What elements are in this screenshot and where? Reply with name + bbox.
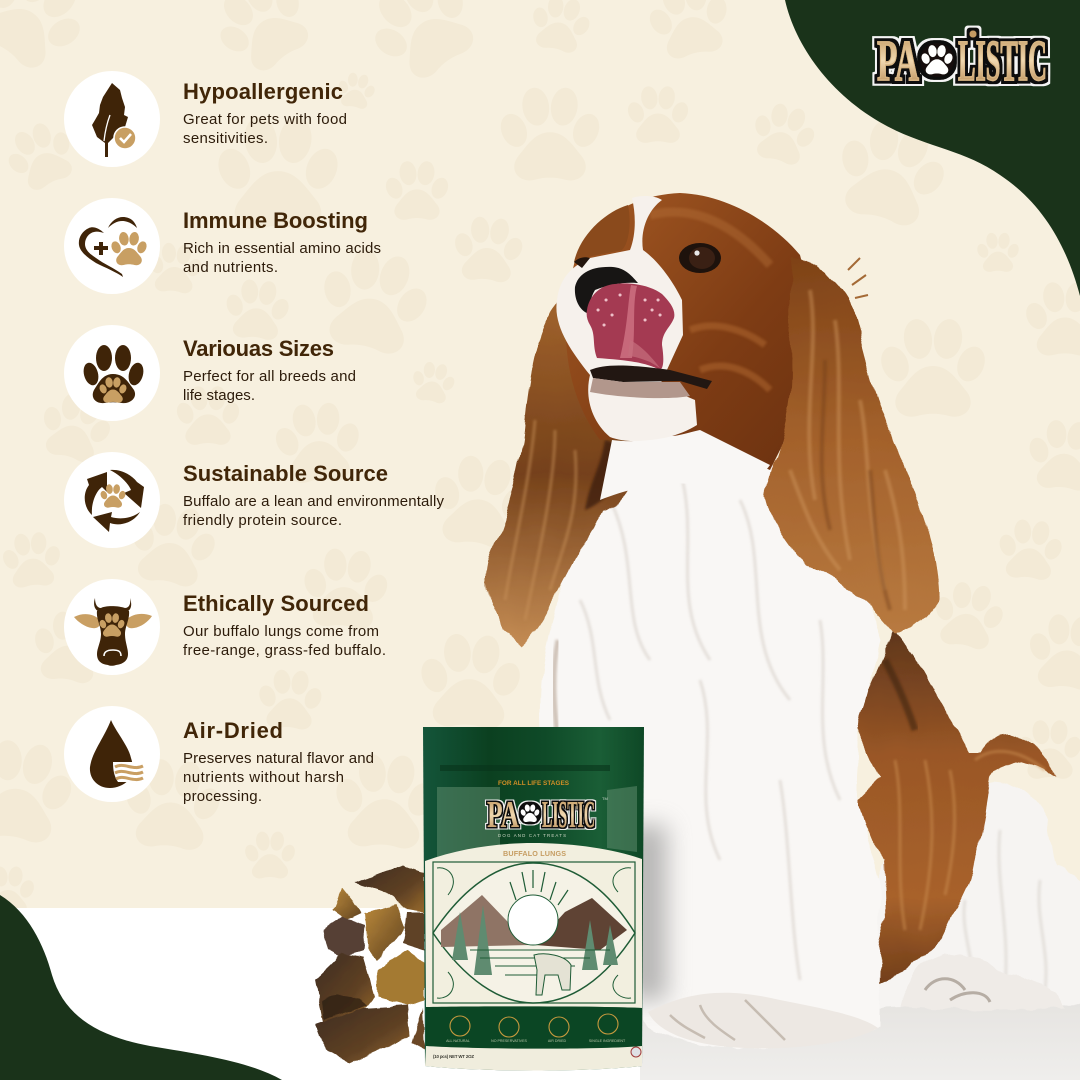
feature: immune boosting: and nutrients. bbox=[183, 259, 278, 276]
green corner shape bottom left bbox=[0, 895, 282, 1080]
logo bbox=[877, 28, 1047, 93]
lower lip bbox=[590, 378, 690, 398]
white blaze and muzzle bbox=[556, 196, 697, 441]
feature: ethically sourced: Ethically Sourced bbox=[183, 591, 369, 616]
buffalo lung chunks bbox=[315, 865, 425, 1063]
product bag bbox=[423, 727, 644, 1070]
dog rear body bbox=[860, 782, 1080, 1008]
claim labels: NO PRESERVATIVES bbox=[491, 1039, 527, 1043]
feature: air-dried: nutrients without harsh bbox=[183, 769, 344, 786]
feature: hypoallergenic: sensitivities. bbox=[183, 130, 268, 147]
green band bbox=[426, 1006, 642, 1049]
left ear bbox=[485, 300, 650, 645]
front paw bbox=[648, 993, 878, 1048]
forehead shading bbox=[650, 212, 770, 265]
feature: immune boosting: Immune Boosting bbox=[183, 208, 368, 233]
claim labels: SINGLE INGREDIENT bbox=[589, 1039, 626, 1043]
feature: air-dried: processing. bbox=[183, 788, 262, 805]
head bbox=[556, 193, 808, 470]
feature: air-dried bbox=[64, 706, 374, 805]
rear paw bbox=[900, 953, 1067, 1011]
feature: ethically sourced: Our buffalo lungs come from bbox=[183, 623, 379, 640]
bag logo bbox=[487, 794, 595, 836]
floor bbox=[0, 908, 1080, 1080]
bottom cream strip bbox=[425, 1046, 642, 1070]
top band shadow bbox=[440, 765, 610, 771]
chest and front legs bbox=[540, 428, 882, 1048]
bag logo: PA bbox=[487, 794, 519, 836]
dog photo illustration bbox=[485, 193, 1080, 1048]
treats line: DOG AND CAT TREATS bbox=[498, 833, 566, 838]
bag side shadow bbox=[625, 825, 667, 1000]
tail and flank bbox=[850, 630, 1057, 987]
net weight: (10 pcs) NET WT 2OZ bbox=[433, 1054, 474, 1059]
right ear bbox=[765, 255, 938, 635]
mouth bbox=[590, 366, 712, 389]
tagline: FOR ALL LIFE STAGES bbox=[498, 780, 570, 787]
feature: immune boosting bbox=[64, 198, 381, 294]
feature: hypoallergenic bbox=[64, 71, 347, 167]
wolf bbox=[534, 954, 571, 995]
cheek lights bbox=[690, 326, 770, 390]
green corner shape top right bbox=[785, 0, 1080, 296]
feature: hypoallergenic: Hypoallergenic bbox=[183, 79, 343, 104]
eye bbox=[679, 243, 721, 273]
nose bbox=[575, 267, 638, 313]
feature: various sizes bbox=[64, 325, 356, 421]
chest fur bbox=[580, 470, 840, 980]
feature: sustainable source bbox=[64, 452, 444, 548]
bag body bbox=[423, 727, 644, 1070]
claim labels: AIR DRIED bbox=[548, 1039, 566, 1043]
feature: various sizes: life stages. bbox=[183, 387, 255, 404]
feature: immune boosting: Rich in essential amino acids bbox=[183, 240, 381, 257]
feature: hypoallergenic: Great for pets with food bbox=[183, 111, 347, 128]
product bag: LISTIC bbox=[542, 794, 595, 836]
claim labels bbox=[446, 1039, 626, 1043]
feature: various sizes: Variouas Sizes bbox=[183, 336, 334, 361]
claim labels: ALL NATURAL bbox=[446, 1039, 470, 1043]
tongue bbox=[587, 283, 674, 370]
rear fur bbox=[964, 830, 1046, 990]
feature: air-dried: Preserves natural flavor and bbox=[183, 750, 374, 767]
feature: sustainable source: Buffalo are a lean and environmentally bbox=[183, 493, 444, 510]
feature: various sizes: Perfect for all breeds and bbox=[183, 368, 356, 385]
feature: sustainable source: friendly protein source. bbox=[183, 512, 342, 529]
feature: ethically sourced bbox=[64, 579, 386, 675]
feature: air-dried: Air-Dried bbox=[183, 718, 283, 743]
logo: PA bbox=[877, 28, 919, 93]
product name: BUFFALO LUNGS bbox=[503, 849, 566, 858]
feature: ethically sourced: free-range, grass-fed buffalo. bbox=[183, 642, 386, 659]
left eye patch bbox=[574, 205, 630, 262]
feature: sustainable source: Sustainable Source bbox=[183, 461, 388, 486]
bag highlights bbox=[437, 786, 637, 858]
neck fur bbox=[600, 430, 770, 500]
usa badge bbox=[631, 1047, 641, 1057]
feature list bbox=[64, 71, 444, 805]
landscape emblem bbox=[433, 862, 635, 1003]
cream label bbox=[425, 843, 642, 1008]
trademark: TM bbox=[602, 796, 608, 801]
claim icons bbox=[450, 1014, 618, 1037]
